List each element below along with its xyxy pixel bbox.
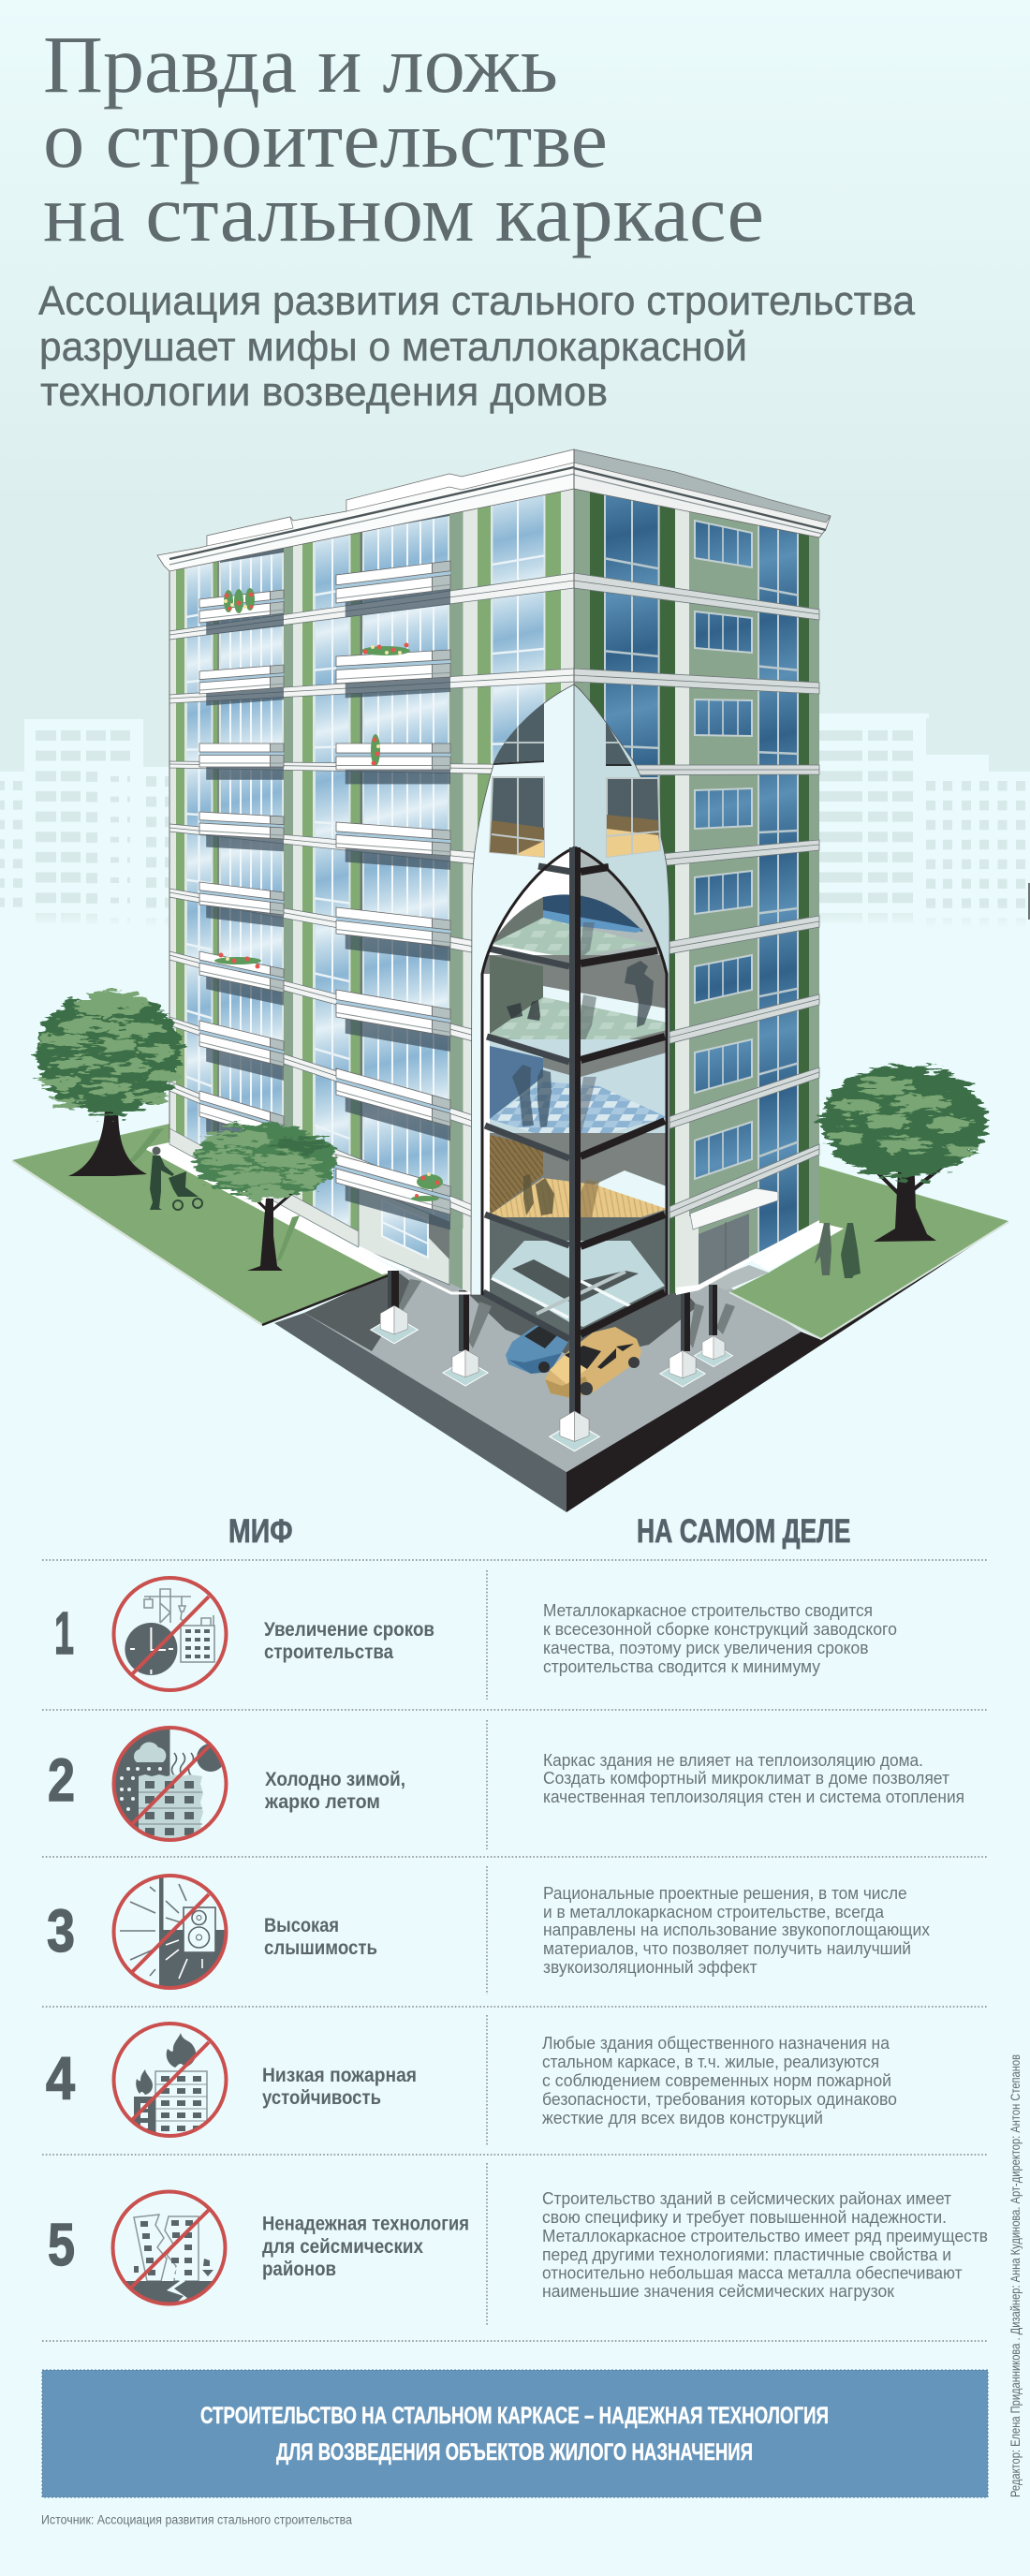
title	[43, 19, 764, 258]
row 5: 5	[48, 2211, 75, 2278]
row 2	[48, 1727, 964, 1841]
row 4: Любые здания общественного назначения на	[542, 2033, 890, 2053]
conclusion banner: СТРОИТЕЛЬСТВО НА СТАЛЬНОМ КАРКАСЕ – НАДЕЖНАЯ ТЕХНОЛОГИЯ	[200, 2403, 829, 2429]
table rules	[42, 1560, 988, 2341]
floor with mother and child	[483, 955, 665, 1039]
right small windows	[695, 521, 752, 1179]
car: yellow	[545, 1327, 641, 1398]
subtitle: разрушает мифы о металлокаркасной	[39, 324, 747, 370]
row 5	[48, 2188, 988, 2309]
ground slab	[274, 1229, 998, 1512]
row 5: свою специфику и требует повышенной надежности.	[542, 2207, 947, 2227]
row 3: и в металлокаркасном строительстве, всегда	[543, 1902, 885, 1921]
row 1: строительства сводится к минимуму	[543, 1656, 821, 1676]
row 2: 2	[48, 1746, 75, 1814]
row 4: безопасности, требования которых одинаково	[542, 2089, 897, 2109]
left floor bands	[169, 573, 574, 1259]
roof cornice	[157, 449, 831, 1139]
row 4: Низкая пожарная	[262, 2065, 417, 2086]
row 2: жарко летом	[264, 1791, 380, 1813]
subtitle: Ассоциация развития стального строительства	[38, 278, 916, 324]
row 1	[54, 1578, 897, 1690]
row 2: Холодно зимой,	[265, 1769, 405, 1790]
floor with parquet	[490, 1133, 665, 1217]
steel frame interior	[482, 843, 670, 1348]
title: о строительстве	[43, 94, 608, 184]
sky	[0, 0, 1030, 773]
left lawn	[12, 1124, 398, 1325]
figure: woman with stroller	[150, 1146, 202, 1210]
row 3: Рациональные проектные решения, в том числе	[543, 1883, 907, 1903]
row 4: стальном каркасе, в т.ч. жилые, реализуются	[542, 2052, 879, 2071]
figure: couple at entrance	[815, 1223, 861, 1278]
row 2: Каркас здания не влияет на теплоизоляцию дома.	[543, 1750, 923, 1770]
floor with couple	[490, 1039, 665, 1133]
row 1: качества, поэтому риск увеличения сроков	[543, 1638, 869, 1657]
row 1: Увеличение сроков	[264, 1619, 434, 1641]
subtitle: технологии возведения домов	[40, 369, 608, 415]
row 1: Металлокаркасное строительство сводится	[543, 1600, 873, 1620]
row 5: Строительство зданий в сейсмических районах имеет	[542, 2188, 951, 2208]
source: Источник: Ассоциация развития стального строительства	[41, 2513, 352, 2526]
right floor bands	[574, 573, 819, 1259]
row 2: Создать комфортный микроклимат в доме позволяет	[543, 1768, 949, 1788]
row 5: Ненадежная технология	[262, 2214, 469, 2234]
steel frame beams and arch outline	[482, 847, 667, 1414]
conclusion banner	[42, 2370, 988, 2497]
row 4: устойчивость	[262, 2087, 381, 2109]
icon: earthquake	[112, 2191, 227, 2309]
entrance door and canopy	[676, 1188, 819, 1295]
icon: crane, clock, building	[114, 1578, 227, 1690]
left bottom floor panels	[169, 1128, 471, 1293]
upper window interiors	[493, 704, 632, 766]
right facade	[574, 468, 819, 1358]
column headers: НА САМОМ ДЕЛЕ	[637, 1513, 850, 1550]
row 4: жесткие для всех видов конструкций	[542, 2108, 823, 2127]
row 3: Высокая	[264, 1915, 339, 1936]
rear columns and pedestals	[371, 1271, 733, 1387]
subtitle	[38, 278, 916, 415]
row 4: с соблюдением современных норм пожарной	[542, 2070, 891, 2090]
title: на стальном каркасе	[43, 168, 764, 258]
row 1: строительства	[264, 1641, 393, 1663]
row 1: к всесезонной сборке конструкций заводского	[543, 1619, 897, 1639]
row 3: слышимость	[264, 1937, 377, 1959]
row 5: Металлокаркасное строительство имеет ряд преимуществ	[542, 2226, 988, 2245]
row 4: 4	[46, 2045, 75, 2112]
row 3: материалов, что позволяет получить наилучший	[543, 1938, 911, 1958]
attic room	[492, 894, 651, 960]
icon: cold and heat	[112, 1727, 227, 1841]
balconies stack A	[199, 590, 284, 1156]
building illustration	[12, 449, 1008, 1512]
car: blue	[506, 1314, 568, 1374]
credits: Редактор: Елена Приданникова . Дизайнер: Анна Кудинова. Арт-директор: Антон Степанов	[1008, 2054, 1023, 2497]
row 4	[46, 2024, 897, 2142]
column headers: МИФ	[228, 1513, 292, 1550]
row 1: 1	[54, 1599, 74, 1667]
tree middle	[194, 1124, 336, 1271]
right lawn	[706, 1166, 1008, 1339]
row 3: направлены на использование звукопоглощающих	[543, 1920, 931, 1939]
row 5: наименьшие значения сейсмических нагрузок	[542, 2281, 895, 2301]
tree left	[37, 992, 183, 1176]
row 2: качественная теплоизоляция стен и система отопления	[543, 1787, 964, 1806]
tree right	[821, 1066, 986, 1242]
conclusion banner: ДЛЯ ВОЗВЕДЕНИЯ ОБЪЕКТОВ ЖИЛОГО НАЗНАЧЕНИЯ	[276, 2439, 753, 2466]
balcony flowers	[214, 588, 443, 1201]
row 5: районов	[262, 2259, 336, 2280]
title: Правда и ложь	[43, 19, 558, 110]
left facade	[170, 490, 573, 1292]
row 3: звукоизоляционный эффект	[543, 1957, 758, 1977]
row 5: перед другими технологиями: пластичные свойства и	[542, 2245, 951, 2264]
row 3	[47, 1873, 931, 1992]
background skyline	[0, 714, 1030, 940]
icon: building on fire	[114, 2024, 227, 2142]
row 5: для сейсмических	[262, 2236, 423, 2258]
row 5: относительно небольшая масса металла обеспечивают	[542, 2262, 963, 2283]
row 3: 3	[47, 1897, 75, 1965]
column headers	[228, 1513, 850, 1550]
icon: noise through wall	[114, 1873, 227, 1992]
cutaway arch	[471, 684, 670, 1295]
column shadows	[399, 1279, 735, 1348]
front column pedestal	[550, 1411, 599, 1451]
ground floor of frame	[490, 1217, 665, 1338]
balconies stack B	[336, 561, 450, 1230]
